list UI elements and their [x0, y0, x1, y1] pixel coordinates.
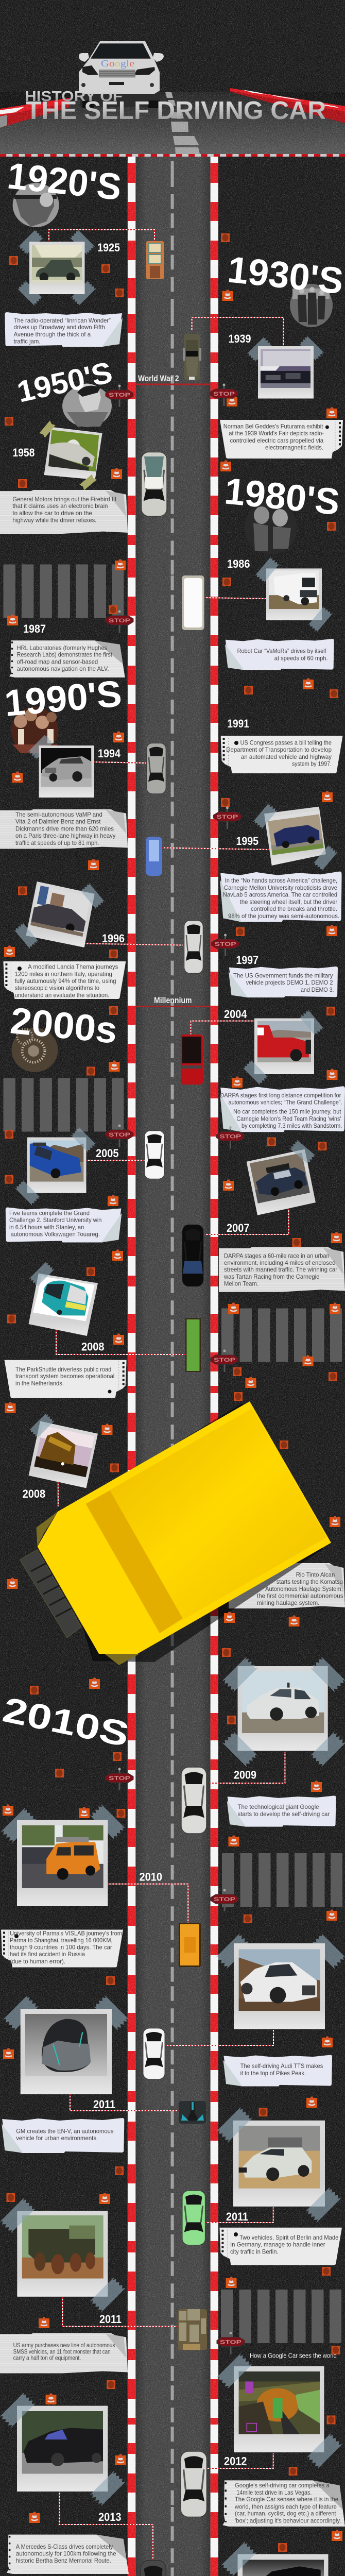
- vehicle: Google Lexus: [181, 1767, 206, 1834]
- note: vehicle for urban environments.: [16, 2134, 98, 2142]
- stop signs: STOP: [109, 618, 130, 624]
- event: 1987: [9, 622, 125, 677]
- vehicle: Firebird III: [142, 452, 167, 516]
- vehicle: dark Mercedes: [141, 2561, 166, 2576]
- note: [227, 1795, 336, 1827]
- vehicle: NavLab 5 van: [146, 837, 162, 876]
- note: The self-driving Audi TTS makes: [240, 2062, 323, 2070]
- year: 2005: [96, 1147, 118, 1160]
- photo: EN-V: [3, 1995, 129, 2094]
- connector: [58, 1482, 59, 1506]
- note: Carnegie Mellon University roboticists drove: [224, 884, 337, 891]
- note: the first commercial autonomous: [257, 1592, 343, 1600]
- stop signs: STOP: [215, 941, 236, 947]
- main road surface: [135, 157, 211, 2576]
- stop signs: STOP: [220, 2340, 242, 2346]
- connector: [162, 848, 269, 850]
- note: 'box'; adjusting it's behaviour accordingly.: [235, 2517, 341, 2524]
- note: [220, 420, 343, 459]
- event: 1991: [221, 717, 343, 773]
- title: [25, 41, 326, 125]
- note: DARPA stages a 60-mile race in an urban: [224, 1252, 330, 1259]
- note: General Motors brings out the Firebird III: [12, 496, 116, 503]
- note: The radio-operated “linrrican Wonder”: [13, 317, 111, 324]
- note: In the “No hands across America” challenge,: [225, 877, 337, 884]
- note: and DEMO 3.: [301, 986, 334, 993]
- event: 2013 Mercedes: [0, 2392, 166, 2576]
- note: off-road map and sensor-based: [16, 658, 98, 666]
- note: though 9 countries in 100 days. The car: [10, 1943, 112, 1951]
- vehicle: 1925 car: [146, 241, 164, 279]
- header divider stripe: [0, 154, 345, 157]
- decade heading: 1950's: 1950'S: [14, 355, 115, 409]
- decade portrait: 1990s: [11, 707, 59, 753]
- note: NavLab 5 across America. The car controlled: [223, 891, 337, 899]
- note: an automated vehicle and highway: [241, 753, 332, 760]
- note: carry a half ton of equipment.: [13, 2354, 81, 2362]
- vehicle: green shuttle: [185, 1318, 201, 1372]
- decade heading: 1920's: 1920'S: [5, 155, 123, 208]
- vehicle: silver car: [181, 2451, 206, 2517]
- note: Robot Car “VaMoRs” drives by itself: [237, 648, 326, 655]
- connector: [204, 1209, 289, 1234]
- note: Department of Transportation to develop: [226, 746, 332, 753]
- vehicle: yellow dump truck: [20, 1401, 331, 1665]
- note: HRL Laboratories (formerly Hughes: [16, 644, 107, 651]
- year: 1958: [12, 446, 34, 459]
- decade heading: 1980's: 1980'S: [222, 470, 341, 523]
- year: 2013: [98, 2511, 122, 2523]
- event: 2011 Spirit of Berlin: [182, 2107, 342, 2265]
- connector: [59, 2492, 153, 2560]
- note: to allow the car to drive on the: [12, 510, 92, 517]
- event: 1925: [5, 229, 164, 347]
- note: [221, 736, 343, 773]
- connector: [192, 317, 283, 346]
- event: 2005: [6, 1127, 164, 1243]
- note: traffic jam.: [13, 338, 40, 345]
- event: 2004: [181, 1008, 345, 1132]
- stop signs: STOP: [109, 1775, 130, 1782]
- vehicle: white Audi: [143, 2028, 165, 2079]
- year: 1939: [229, 332, 251, 345]
- note: SMSS vehicles, an 11 foot monster that can: [13, 2348, 110, 2355]
- year: 1991: [227, 717, 249, 730]
- note: in the Netherlands.: [15, 1380, 64, 1387]
- note: [4, 1360, 127, 1398]
- Google self driving car illustration: Google: [101, 58, 134, 69]
- event: 2009: [181, 1656, 345, 1834]
- note: University of Parma's VISLAB journey's from: [10, 1930, 122, 1937]
- photo: lidar view: [216, 2353, 342, 2469]
- milestone: Millennium: Millennium: [154, 995, 192, 1005]
- note: on a Paris three-lane highway in heavy: [15, 832, 115, 839]
- note: at speeds of 60 mph.: [274, 654, 328, 662]
- note: [3, 961, 126, 999]
- photo: Futurama exhibit: [247, 335, 324, 399]
- connector: [85, 944, 183, 945]
- note: at the 1939 World's Fair depicts radio-: [229, 430, 324, 437]
- photo: NavLab 5: [253, 803, 338, 871]
- note: [225, 639, 334, 670]
- note: The Google Car senses where it is in the: [235, 2496, 338, 2503]
- year: 2011: [93, 2098, 115, 2111]
- event: 2008 Rio Tinto: [23, 1413, 345, 1608]
- note: 1200 miles in northern Italy, operating: [15, 971, 112, 978]
- connector: [56, 1330, 185, 1354]
- milestone: World War 2: World War 2: [138, 374, 179, 383]
- photo: VaMP: [28, 734, 94, 798]
- year: 1994: [98, 747, 121, 760]
- note: the steering wheel itself, but the driver: [240, 898, 337, 905]
- note: A Mercedes S-Class drives completely: [16, 2543, 113, 2550]
- note: autonomous Volkswagen Touareg.: [10, 1230, 100, 1238]
- note: [5, 312, 123, 347]
- event: 2007: [182, 1140, 345, 1292]
- year: 2011: [99, 2313, 122, 2326]
- decade heading: 1930's: 1930'S: [226, 249, 345, 302]
- year: 1987: [23, 622, 46, 635]
- note: that it claims uses an electronic brain: [12, 502, 108, 510]
- connector: [49, 230, 154, 241]
- note: The ParkShuttle driverless public road: [15, 1366, 111, 1373]
- year: 1995: [236, 835, 258, 848]
- note: understand an evaluate the situation.: [15, 991, 109, 998]
- note: [229, 1563, 345, 1608]
- note: vehicle projects DEMO 1, DEMO 2: [246, 979, 333, 986]
- road centre line: [171, 161, 174, 2576]
- note: [229, 967, 338, 997]
- photo: ParkShuttle: [29, 1261, 98, 1336]
- note: city traffic in Berlin.: [230, 2248, 279, 2255]
- note: (car, human, cyclist, dog etc.) a different: [235, 2510, 336, 2517]
- decade portrait: 2000s: [11, 1028, 58, 1072]
- year: 2007: [227, 1222, 249, 1234]
- event: 1958: [0, 420, 167, 534]
- note: Avenue through the thick of a: [13, 331, 91, 338]
- photo: Stanley: [15, 1127, 96, 1206]
- stop signs: STOP: [213, 391, 235, 397]
- year: 2009: [234, 1768, 256, 1782]
- note: autonomously for 100km following the: [16, 2550, 116, 2557]
- photo: SMSS: [0, 2197, 126, 2313]
- note: [2, 2118, 124, 2153]
- vehicle: SMSS: [178, 2309, 207, 2350]
- decade heading: 1990's: 1990'S: [3, 673, 124, 724]
- crosswalks: [3, 565, 342, 2576]
- Google self driving car illustration: [79, 41, 164, 108]
- note: Google's self-driving car completes a: [235, 2482, 330, 2489]
- note: Rio Tinto Alcan: [296, 1571, 335, 1579]
- photo: Mercedes S-Class: [0, 2392, 126, 2506]
- note: [0, 809, 128, 849]
- note: US army purchases new line of autonomous: [13, 2342, 115, 2349]
- decade heading: 2010s: 2010S: [0, 1690, 132, 1754]
- connector: [191, 1021, 254, 1035]
- note: Parma to Shanghai, travelling 16 000KM,: [10, 1937, 112, 1944]
- note: fully autumously 94% of the time, using: [15, 977, 116, 985]
- photo: Spirit of Berlin: [216, 2107, 341, 2223]
- event: 1994: [0, 734, 166, 849]
- note: [219, 1247, 345, 1292]
- note: US Congress passes a bill telling the: [240, 739, 332, 747]
- vehicle: Tartan Racing: [182, 1225, 203, 1286]
- connector: [209, 1752, 285, 1783]
- note: [220, 871, 342, 922]
- photo: Firebird III: [39, 420, 102, 490]
- event: 1986: [182, 557, 334, 670]
- note: stereoscopic vision algorithms to: [15, 985, 99, 992]
- vehicle: orange van: [179, 1923, 201, 1967]
- stop signs: [101, 383, 245, 2576]
- stop signs: STOP: [109, 1132, 130, 1138]
- note: streets with manned traffic. The winning car: [224, 1266, 337, 1273]
- connector: [204, 598, 266, 599]
- stop signs: STOP: [219, 1133, 241, 1140]
- year: 2008: [81, 1341, 104, 1353]
- connector: [108, 1884, 188, 1923]
- year: 1925: [97, 241, 120, 254]
- note: autonomous navigation on the ALV.: [16, 665, 109, 672]
- stop signs: STOP: [214, 1896, 235, 1903]
- vehicle: Sandstorm jeep: [181, 1035, 203, 1084]
- note: historic Bertha Benz Memorial Route.: [16, 2557, 111, 2564]
- note: Two vehicles, Spirit of Berlin and Made: [239, 2234, 339, 2241]
- event: 1939: [183, 317, 343, 459]
- event: 1996: [3, 882, 203, 999]
- note: [0, 490, 128, 534]
- note: [6, 1208, 122, 1243]
- event: 1997: [229, 954, 338, 997]
- note: 14mile test drive in Las Vegas.: [236, 2489, 312, 2496]
- note: [0, 2333, 128, 2373]
- year: 1996: [102, 932, 125, 945]
- connector: [94, 762, 146, 763]
- vehicle: EN-V pod: [179, 2101, 206, 2124]
- note: highway while the driver relaxes.: [12, 516, 96, 523]
- photo: VisLab van: [1, 1804, 126, 1906]
- note: Dickmanns drive more than 620 miles: [15, 825, 114, 832]
- connector: [206, 2453, 273, 2468]
- note: electromagnetic fields.: [265, 444, 323, 451]
- decade portrait: 1980s: [245, 501, 297, 554]
- header road: [0, 88, 345, 154]
- connector: [70, 2094, 179, 2111]
- note: had its first accident in Russia: [10, 1951, 85, 1958]
- photo: Sandstorm: [243, 1010, 324, 1085]
- note: environment, including 4 miles of enclosed: [224, 1259, 336, 1266]
- note: controlled the breaks and throttle.: [251, 905, 337, 912]
- photo: Google Lexus: [222, 1656, 345, 1767]
- note: The US Government funds the military: [233, 972, 333, 979]
- note: The semi-autonomous VaMP and: [15, 811, 102, 818]
- note: starts to develop the self-driving car: [238, 1810, 330, 1818]
- vehicle: Stanley: [145, 1131, 164, 1179]
- note: world, then assigns each type of feature: [234, 2503, 337, 2510]
- note: [1, 1930, 123, 1968]
- note: controlled electric cars propelled via: [230, 437, 323, 444]
- road curbs: [132, 157, 214, 2576]
- note: Mellon Team.: [224, 1280, 258, 1287]
- stop signs: STOP: [216, 814, 238, 820]
- vehicle: VaMoRs van: [182, 575, 204, 630]
- note: transport system becomes operational: [15, 1372, 114, 1380]
- vehicle: Lancia Thema: [184, 921, 203, 973]
- note: system by 1997.: [292, 760, 332, 767]
- note: In Germany, manage to handle inner: [230, 2241, 325, 2248]
- year: 2010: [139, 1870, 162, 1884]
- note: [7, 2535, 129, 2574]
- note: in 6.54 hours with Stanley, an: [9, 1224, 84, 1231]
- photo: VaMoRs: [255, 557, 333, 632]
- connector: [165, 2030, 273, 2045]
- event: 2008 ParkShuttle: [4, 1261, 201, 1398]
- decade heading: 2000s: 2000s: [8, 1000, 119, 1052]
- note: Norman Bel Geddes's Futurama exhibit: [223, 423, 323, 430]
- decade portrait: 1920s: [13, 183, 59, 227]
- note: [223, 2055, 332, 2087]
- note: mining haulage system.: [257, 1599, 319, 1606]
- note: Five teams complete the Grand: [9, 1210, 90, 1217]
- note: traffic at speeds of up to 81 mph.: [15, 839, 99, 846]
- event: 1995: [146, 803, 342, 922]
- vehicle: lime green car: [182, 2191, 205, 2245]
- note: Challenge 2. Stanford University win: [9, 1216, 102, 1224]
- note: GM creates the EN-V, an autonomous: [16, 2128, 114, 2135]
- connector: [62, 2297, 177, 2327]
- photo: Lancia Thema: [14, 882, 105, 948]
- event: 2011 SMSS: [0, 2197, 207, 2373]
- event: 2011 GM EN-V: [2, 1995, 206, 2153]
- event: 2010 Audi TTS: [143, 1933, 345, 2087]
- vehicle: VaMP sedan: [147, 743, 166, 794]
- stop signs: STOP: [214, 1357, 235, 1363]
- event: 2010 VisLab: [1, 1804, 201, 1968]
- note: it to the top of Pikes Peak.: [240, 2070, 306, 2077]
- note: drives up Broadway and down Fifth: [13, 324, 105, 331]
- photo: Tesla Model S: [221, 2541, 345, 2576]
- title: THE SELF DRIVING CAR: [26, 97, 326, 125]
- vehicle: 1930s olive car: [183, 334, 201, 380]
- year: 2008: [23, 1487, 45, 1500]
- connector: [206, 2207, 273, 2223]
- stop signs: STOP: [109, 392, 130, 398]
- year: 2004: [224, 1008, 247, 1021]
- year: 2011: [226, 2210, 248, 2223]
- note: 98% of the journey was semi-autonomous.: [228, 912, 339, 920]
- note: Research Labs) demonstrates the first: [16, 651, 112, 658]
- year: 2012: [224, 2455, 247, 2468]
- note: Vita-2 of Daimler-Benz and Ernst: [15, 818, 101, 825]
- photo: Audi TTS: [215, 1933, 345, 2029]
- year: 1997: [236, 954, 258, 967]
- decade portrait: 1950s: [62, 383, 112, 427]
- note: was Tartan Racing from the Carnegie: [223, 1273, 320, 1280]
- year: 1986: [227, 557, 250, 570]
- photo: American Wonder: [17, 229, 96, 306]
- milestone: World War 2: [135, 374, 211, 385]
- photo: Tartan Racing: [247, 1140, 316, 1215]
- note: A modified Lancia Thema journeys: [28, 963, 118, 971]
- note: [222, 2480, 345, 2527]
- milestone: Millennium: [135, 995, 211, 1007]
- note: [9, 640, 125, 677]
- event: 2014 Tesla: [179, 2541, 345, 2576]
- photo: Komatsu truck: [29, 1413, 98, 1488]
- connector: [87, 1160, 145, 1161]
- decade portrait: 1930s: [290, 284, 333, 327]
- event: 2012 Google Car vision: [181, 2352, 345, 2527]
- note: [219, 2228, 342, 2265]
- title: HISTORY OF: [25, 88, 123, 104]
- note: The technological giant Google: [238, 1803, 319, 1810]
- note: (due to human error).: [10, 1958, 65, 1965]
- note: [220, 1086, 345, 1132]
